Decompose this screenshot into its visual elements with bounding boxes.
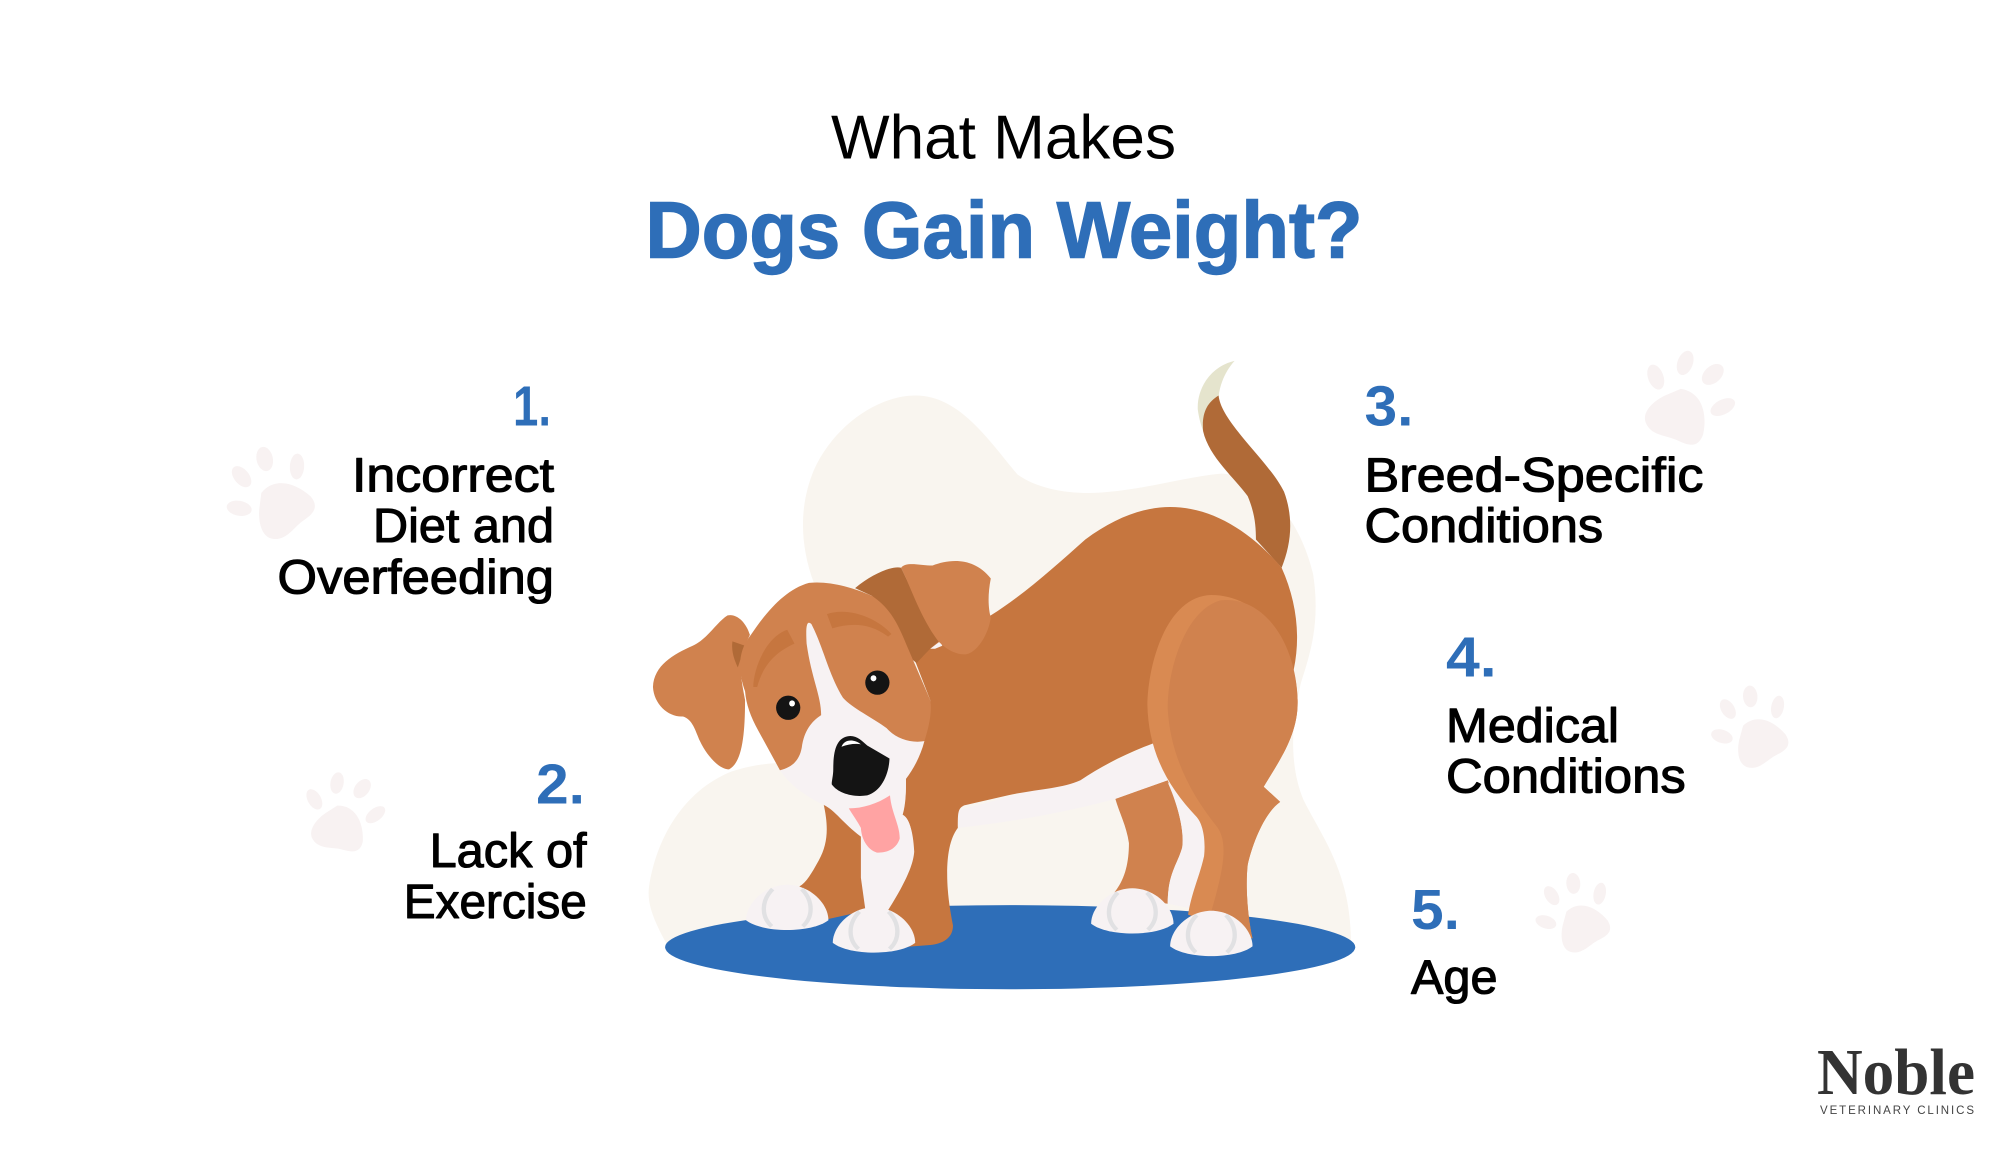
item 3: [1364, 374, 1704, 553]
body: [882, 507, 1297, 948]
label 1: Overfeeding: [278, 552, 554, 605]
title: [646, 104, 1362, 274]
title line 2: Dogs Gain Weight?: [646, 186, 1362, 274]
number 1: 1.: [513, 374, 551, 438]
inner hind leg: [1168, 782, 1206, 908]
number 2: 2.: [536, 752, 585, 816]
label 2: Lack of: [430, 825, 587, 878]
far front leg: [799, 804, 867, 919]
right ear: [855, 561, 991, 663]
blue ground ellipse: [665, 905, 1355, 989]
number 3: 3.: [1364, 374, 1414, 438]
item 1: [278, 374, 554, 605]
paw print 3: [1621, 332, 1751, 460]
item 4: [1446, 625, 1686, 804]
label 1: [278, 449, 554, 605]
head: [740, 582, 931, 770]
number 5: 5.: [1411, 878, 1460, 942]
item 5: [1411, 878, 1498, 1004]
label 4: [1446, 700, 1686, 804]
brows: [753, 612, 891, 687]
paw print 1: [226, 445, 315, 539]
face white: [780, 622, 924, 843]
label 2: Exercise: [404, 876, 587, 929]
near hind leg: [1147, 595, 1298, 939]
tail: [1198, 361, 1290, 568]
chest and near front leg: [848, 795, 914, 912]
label 4: Conditions: [1446, 751, 1686, 804]
dog illustration: [649, 361, 1355, 989]
title line 1: What Makes: [831, 104, 1176, 172]
label 1: Incorrect: [352, 449, 554, 502]
tongue: [849, 795, 900, 853]
label 3: [1364, 449, 1704, 553]
decorative paw prints: [226, 332, 1796, 957]
left ear: [653, 615, 750, 769]
paw print 5: [1531, 867, 1617, 957]
logo tagline: VETERINARY CLINICS: [1820, 1105, 1974, 1117]
logo: [1817, 1036, 1975, 1117]
nose: [832, 736, 889, 796]
label 2: [404, 825, 587, 929]
label 5: Age: [1411, 952, 1498, 1004]
label 1: Diet and: [373, 500, 554, 553]
label 4: Medical: [1446, 700, 1619, 753]
paw print 4: [1706, 680, 1796, 773]
item 2: [404, 752, 587, 929]
logo wordmark: Noble: [1817, 1036, 1975, 1109]
paws: [746, 885, 1253, 956]
label 3: Breed-Specific: [1364, 449, 1704, 502]
paw print 2: [286, 754, 400, 868]
background blob: [649, 396, 1351, 947]
eyes: [776, 670, 889, 720]
belly: [958, 743, 1168, 828]
number 4: 4.: [1446, 625, 1497, 689]
label 3: Conditions: [1364, 500, 1603, 553]
far hind leg: [1112, 780, 1183, 904]
